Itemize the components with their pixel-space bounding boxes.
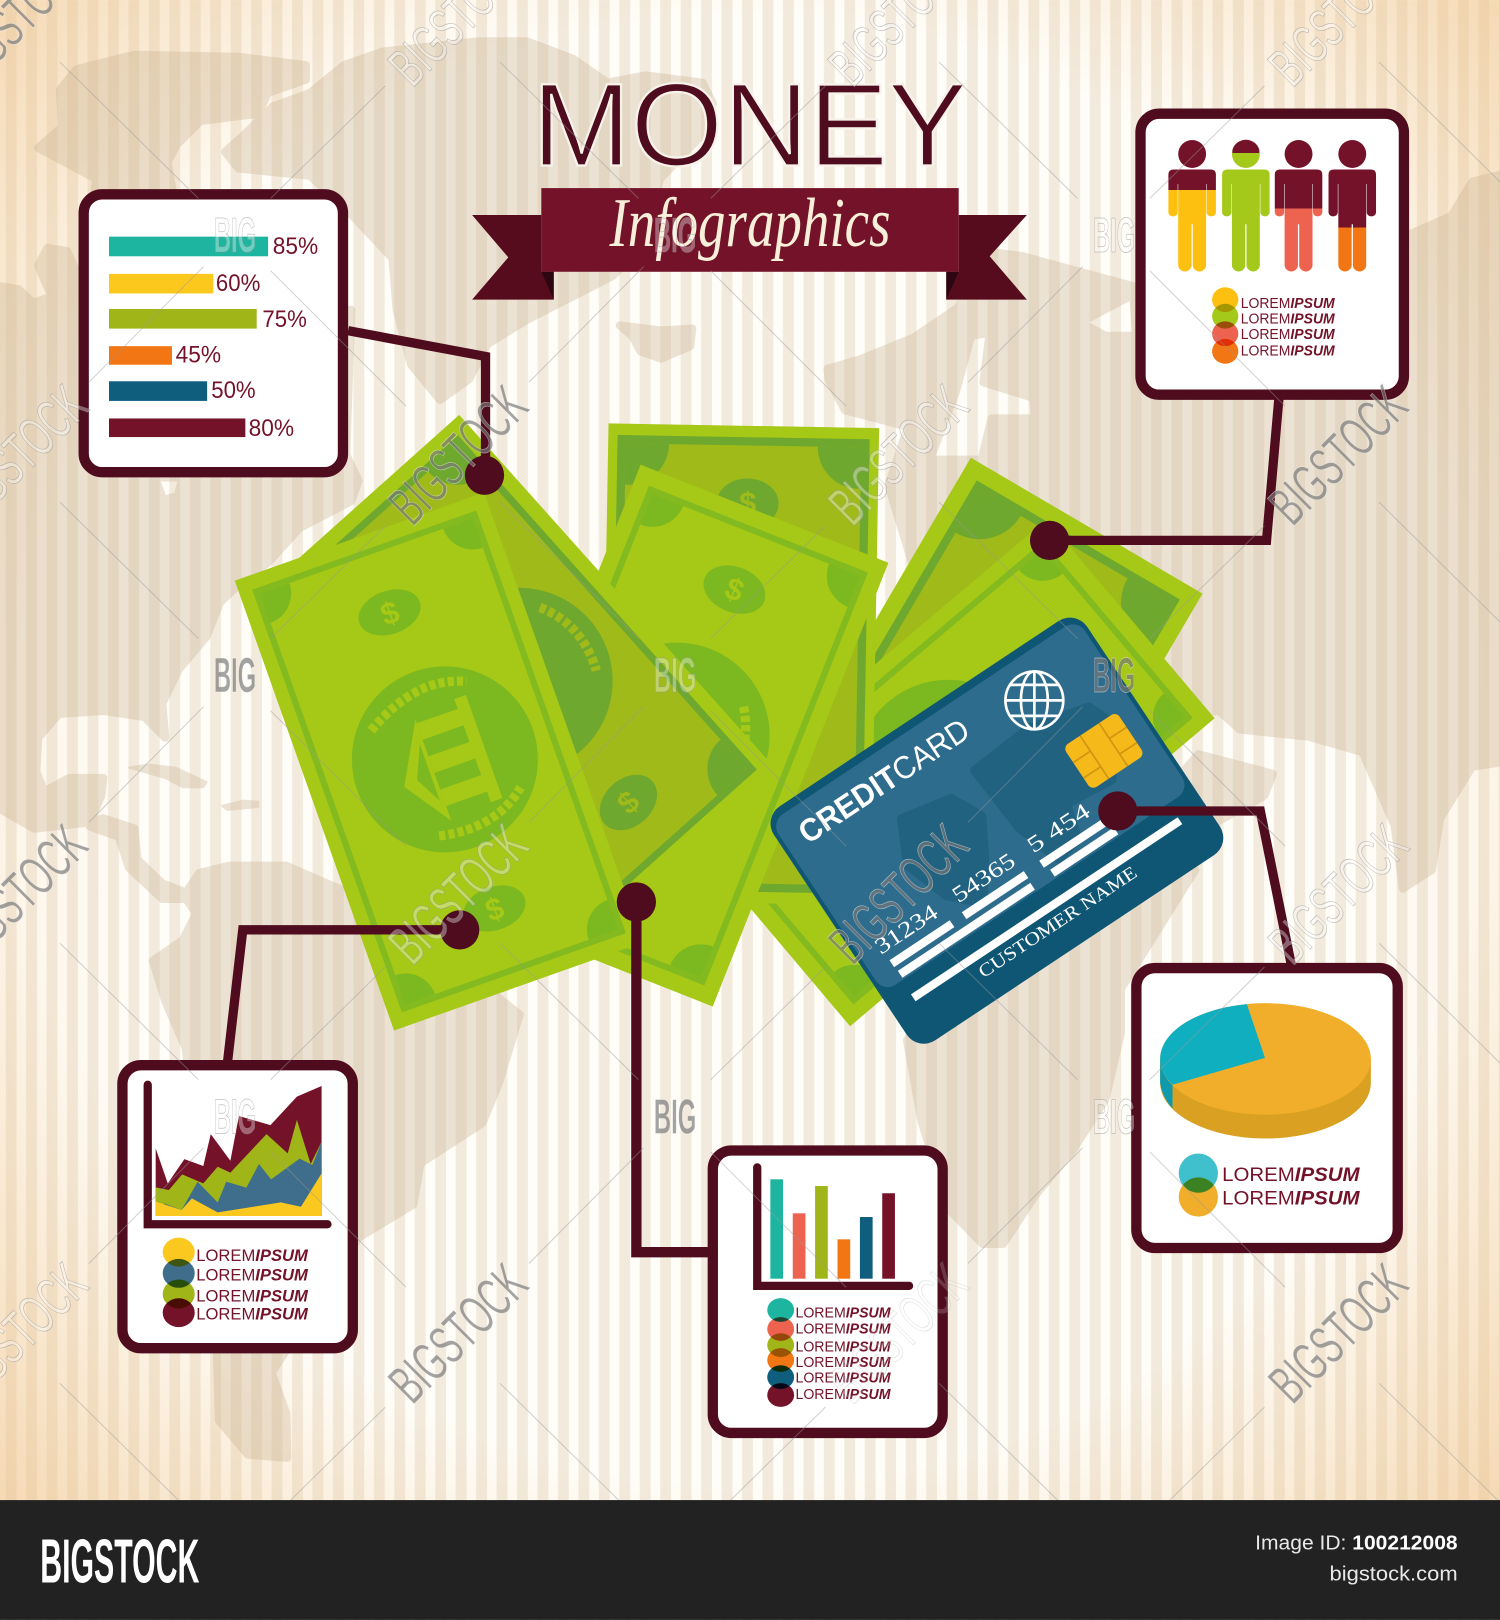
watermark BIG text: BIG xyxy=(214,647,256,703)
bar 80% xyxy=(109,415,294,442)
column legend: LOREMIPSUM xyxy=(795,1321,891,1337)
area chart xyxy=(148,1085,327,1224)
credit card xyxy=(763,610,1231,1052)
watermark BIGSTOCK text: BIGSTOCK xyxy=(377,374,539,536)
bill: middle front xyxy=(465,465,888,1007)
text: BIG xyxy=(1093,207,1135,263)
card stripes xyxy=(889,784,1182,1001)
people legend xyxy=(1212,287,1336,364)
people legend: LOREMIPSUM xyxy=(1241,343,1336,359)
bill: left front xyxy=(235,492,643,1031)
bar 85%: 85% xyxy=(273,233,318,260)
watermark BIGSTOCK text: BIGSTOCK xyxy=(1257,1252,1419,1414)
panel: area chart xyxy=(122,1065,353,1348)
bar 50%: 50% xyxy=(211,377,256,404)
column legend: LOREMIPSUM xyxy=(795,1339,891,1355)
area legend: LOREMIPSUM xyxy=(196,1266,309,1285)
watermark BIGSTOCK text: BIGSTOCK xyxy=(377,813,539,975)
connector: people panel xyxy=(1030,398,1279,560)
panel: column chart xyxy=(713,1150,943,1433)
bar 75%: 75% xyxy=(262,306,307,333)
watermark BIGSTOCK text: BIGSTOCK xyxy=(817,813,979,975)
text: BIG xyxy=(1093,647,1135,703)
card label: CREDITCARD xyxy=(792,711,976,851)
watermark BIG text: BIG xyxy=(654,207,696,263)
bar 80%: 80% xyxy=(249,415,294,442)
bar 45% xyxy=(109,341,221,368)
icon: globe xyxy=(1005,671,1063,729)
people legend: LOREMIPSUM xyxy=(1241,311,1336,327)
person 3 xyxy=(1275,140,1322,271)
bill: middle front: $ xyxy=(720,570,749,609)
area legend: LOREMIPSUM xyxy=(196,1287,309,1306)
watermark BIGSTOCK text: BIGSTOCK xyxy=(817,374,979,536)
column legend: LOREMIPSUM xyxy=(795,1370,891,1386)
column legend: LOREMIPSUM xyxy=(795,1387,891,1403)
watermark BIG text xyxy=(214,207,1135,1144)
watermark BIGSTOCK text: BIGSTOCK xyxy=(1257,374,1419,536)
pie legend: LOREM IPSUM xyxy=(1222,1165,1361,1186)
bill: middle back: $ xyxy=(739,485,757,521)
bar 85% xyxy=(109,233,318,260)
title: MONEY xyxy=(532,58,967,190)
footer bar: BIGSTOCK xyxy=(40,1528,199,1597)
area legend: LOREMIPSUM xyxy=(196,1304,309,1323)
bill: left front: $ xyxy=(481,890,509,929)
watermark BIG text: BIG xyxy=(214,1088,256,1144)
bar 75% xyxy=(109,306,307,333)
connector: column panel xyxy=(617,882,713,1252)
watermark BIGSTOCK text: BIGSTOCK xyxy=(1257,813,1419,975)
column chart xyxy=(757,1167,909,1286)
bill: right front xyxy=(682,519,1215,1026)
bill: left back: $ xyxy=(610,784,646,821)
subtitle: Infographics xyxy=(609,184,890,262)
pie xyxy=(1160,1003,1371,1139)
watermark BIG text: BIG xyxy=(654,647,696,703)
footer bar xyxy=(0,1500,1500,1620)
panel: horizontal bars xyxy=(84,194,343,472)
area legend xyxy=(163,1238,309,1327)
people legend: LOREMIPSUM xyxy=(1241,327,1336,343)
pie legend: LOREM IPSUM xyxy=(1222,1189,1361,1210)
bill: left front: $ xyxy=(376,594,404,633)
column legend: LOREMIPSUM xyxy=(795,1306,891,1322)
person 2 xyxy=(1222,140,1270,271)
area legend: LOREMIPSUM xyxy=(196,1246,309,1265)
column legend: LOREMIPSUM xyxy=(795,1355,891,1371)
pie legend xyxy=(1179,1153,1361,1217)
bar 60%: 60% xyxy=(216,270,260,297)
bill: middle back xyxy=(600,423,879,905)
chip xyxy=(1063,712,1145,790)
people legend: LOREMIPSUM xyxy=(1241,296,1336,312)
person 4 xyxy=(1329,140,1376,271)
ribbon banner xyxy=(472,184,1027,300)
connector: pie panel xyxy=(1098,791,1291,965)
connector: area panel xyxy=(227,910,479,1064)
watermark BIGSTOCK text: BIGSTOCK xyxy=(377,1252,539,1414)
card world map xyxy=(882,689,1157,929)
bar 60% xyxy=(109,270,260,297)
watermark BIGSTOCK text: BIGSTOCK xyxy=(817,1252,979,1414)
card numbers: 5 454 xyxy=(1022,798,1095,858)
bar 50% xyxy=(109,377,256,404)
watermark BIG text: BIG xyxy=(214,207,256,263)
person 1 xyxy=(1168,140,1216,271)
column legend xyxy=(767,1298,891,1407)
text: BIG xyxy=(1093,1088,1135,1144)
site url: bigstock.com xyxy=(1330,1563,1458,1586)
customer name: CUSTOMER NAME xyxy=(975,862,1141,983)
connector: bars panel xyxy=(348,331,504,495)
panel: people xyxy=(1140,114,1404,395)
watermark BIG text: BIG xyxy=(654,1088,696,1144)
card numbers: 54365 xyxy=(947,848,1020,908)
bill: right back xyxy=(729,458,1203,1005)
image id: Image ID: 100212008 xyxy=(1255,1531,1458,1554)
panel: pie chart xyxy=(1136,968,1398,1248)
bill: left back xyxy=(262,415,777,947)
card numbers: 31234 xyxy=(870,899,942,959)
card numbers xyxy=(870,798,1095,959)
bar 45%: 45% xyxy=(176,341,221,368)
